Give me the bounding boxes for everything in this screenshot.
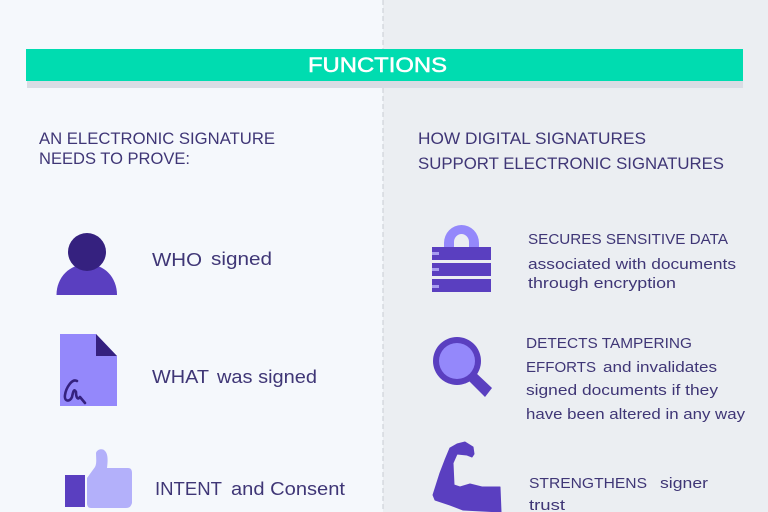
left heading [39,129,275,168]
strengthens text [529,475,708,512]
who signed [152,249,272,270]
intent and consent: INTENT [155,479,222,499]
title banner [26,49,743,88]
who signed: signed [211,249,272,269]
right heading: SUPPORT ELECTRONIC SIGNATURES [418,154,724,173]
intent and consent: and Consent [231,479,345,499]
intent and consent [155,479,345,499]
secures sensitive data text: through encryption [528,275,676,292]
detects tampering text [526,335,746,423]
what was signed [152,367,317,387]
right heading: HOW DIGITAL SIGNATURES [418,129,646,148]
strengthens text: STRENGTHENS [529,475,647,492]
icon: lock [432,225,491,292]
icon: magnifying glass [433,337,492,397]
detects tampering text: have been altered in any way [526,406,746,423]
detects tampering text: and invalidates [603,359,717,376]
left heading: NEEDS TO PROVE: [39,149,190,168]
title banner: FUNCTIONS [308,54,447,77]
strengthens text: signer [660,475,708,492]
left heading: AN ELECTRONIC SIGNATURE [39,129,275,148]
secures sensitive data text [528,231,736,292]
detects tampering text: signed documents if they [526,382,719,399]
icon: person [56,233,117,295]
right heading [418,129,724,173]
icon: signed document [60,334,117,406]
what was signed: WHAT [152,367,209,387]
icon: flexed arm [433,442,501,512]
what was signed: was signed [216,367,317,387]
secures sensitive data text: SECURES SENSITIVE DATA [528,231,728,248]
icon: thumbs up [65,449,132,508]
detects tampering text: DETECTS TAMPERING [526,335,692,352]
detects tampering text: EFFORTS [526,359,596,376]
who signed: WHO [152,250,202,270]
secures sensitive data text: associated with documents [528,256,736,273]
